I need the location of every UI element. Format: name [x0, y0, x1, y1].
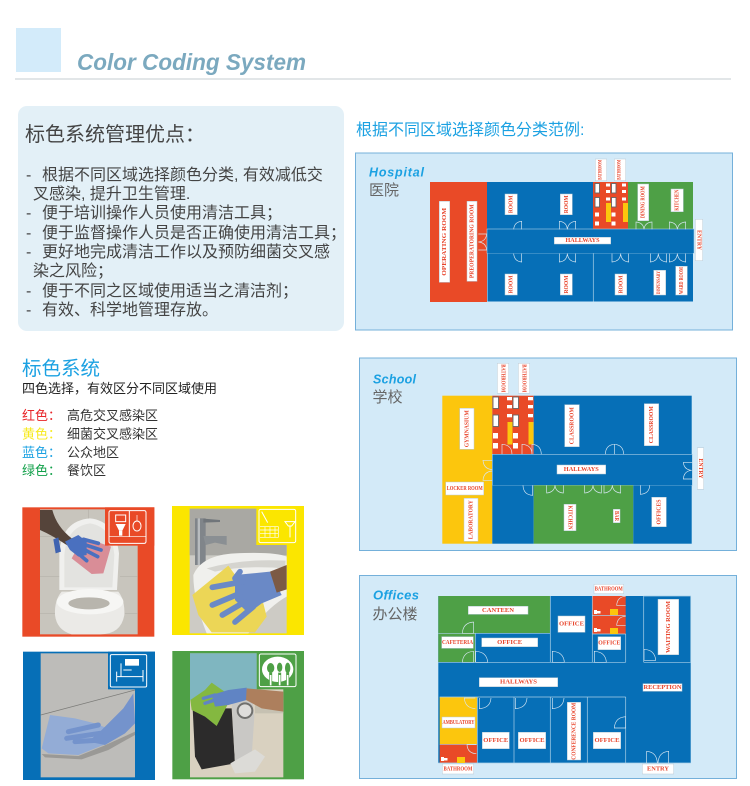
hospital room labels: ROOM: [508, 195, 515, 213]
school chinese title: 学校: [372, 389, 403, 406]
legend rows: 公众地区: [67, 445, 119, 460]
school title: School: [373, 372, 417, 386]
offices room labels: OFFICE: [483, 737, 508, 744]
offices room labels: OFFICE: [559, 621, 584, 628]
school bathroom fixtures: [493, 397, 534, 448]
hospital title: Hospital: [369, 166, 425, 180]
advantages list: 叉感染, 提升卫生管理.: [33, 185, 190, 203]
offices room labels: ENTRY: [647, 766, 669, 772]
advantages list: -: [26, 283, 31, 300]
offices walls: [438, 596, 691, 763]
hospital room labels: DINING ROOM: [640, 186, 647, 218]
advantages list: 更好地完成清洁工作以及预防细菌交叉感: [42, 243, 330, 261]
advantages list: 根据不同区域选择颜色分类, 有效减低交: [42, 166, 323, 184]
offices room labels: CONFERENCE ROOM: [570, 703, 578, 760]
hospital room labels: KITCHEN: [674, 190, 681, 211]
legend rows: 蓝色：: [22, 442, 61, 461]
legend rows: 餐饮区: [67, 463, 106, 478]
school room labels: HALLWAYS: [564, 466, 599, 473]
school room labels: BATHROOM: [500, 364, 506, 392]
offices title: Offices: [373, 588, 419, 602]
icon: fork, spoon and plate: [257, 651, 304, 689]
hospital room labels: ROOM: [563, 276, 570, 294]
offices room labels: OFFICE: [497, 639, 522, 646]
icon: hospital bed: [108, 652, 155, 689]
advantages list: 有效、科学地管理存放。: [42, 301, 218, 319]
card: blue floor: [23, 652, 155, 780]
advantages list: -: [26, 225, 31, 242]
offices room labels: AMBULATORY: [442, 719, 475, 726]
advantages list: -: [26, 167, 31, 184]
school room labels: GYMNASIUM: [463, 410, 470, 447]
school room labels: KITCHEN: [566, 506, 574, 530]
school floor plan: [442, 363, 704, 544]
offices room labels: BATHROOM: [444, 766, 472, 772]
hospital doors: [478, 221, 686, 262]
legend rows: [22, 405, 158, 479]
advantages list: -: [26, 244, 31, 261]
icon: toilet and urinal: [105, 507, 154, 546]
card: red toilet: [22, 507, 154, 637]
title: Color Coding System: [77, 49, 306, 75]
panel: advantages: [18, 106, 346, 331]
offices room labels: RECEPTION: [644, 684, 682, 691]
legend rows: 高危交叉感染区: [67, 408, 158, 423]
hospital room labels: ROOM: [508, 276, 515, 294]
colour system legend: [22, 358, 217, 479]
offices room labels: CAFETERIA: [442, 639, 473, 646]
offices doors: [462, 596, 669, 763]
heading: colour-coding examples: 根据不同区域选择颜色分类范例:: [356, 121, 584, 139]
hospital room labels: [439, 159, 703, 295]
hospital room labels: DISPENSARY: [657, 271, 662, 294]
legend rows: 细菌交叉感染区: [67, 426, 158, 442]
panel: school: [360, 358, 736, 550]
school room labels: CLASSROOM: [648, 406, 655, 443]
panel: hospital: [356, 153, 732, 330]
header colour square: [16, 28, 61, 72]
advantages list: -: [26, 205, 31, 222]
school room labels: OFFICES: [656, 499, 662, 524]
school room labels: LOCKER ROOM: [447, 485, 483, 492]
advantages list: 便于不同之区域使用适当之清洁剂；: [42, 277, 298, 301]
advantages list: 便于培训操作人员使用清洁工具；: [42, 199, 282, 223]
legend subtitle: 四色选择，有效区分不同区域使用: [22, 378, 217, 397]
offices room labels: WAITING ROOM: [665, 601, 672, 653]
card: green machine: [172, 651, 304, 779]
hospital bathroom fixtures: [595, 184, 628, 226]
advantages list: -: [26, 302, 31, 319]
panel: offices: [360, 576, 736, 778]
offices room labels: CANTEEN: [482, 607, 514, 614]
hospital room labels: BATHROOM: [598, 160, 604, 180]
legend heading: 标色系统: [22, 358, 100, 380]
offices chinese title: 办公楼: [372, 606, 418, 623]
hospital room labels: ROOM: [617, 276, 624, 294]
school room labels: CLASSROOM: [568, 407, 576, 444]
school room labels: [446, 363, 704, 541]
legend rows: 黄色：: [22, 424, 61, 442]
hospital room labels: PREOPERATORING ROOM: [468, 204, 476, 278]
offices room labels: OFFICE: [520, 737, 544, 744]
icon: sink and shower: [256, 506, 304, 545]
hospital room labels: ENTRY: [696, 230, 702, 250]
hospital room labels: HALLWAYS: [566, 237, 600, 244]
school doors: [483, 444, 692, 495]
offices room labels: OFFICE: [598, 640, 620, 647]
hospital floor plan: [430, 159, 703, 302]
legend rows: 绿色：: [22, 460, 61, 479]
advantages list: 便于监督操作人员是否正确使用清洁工具；: [42, 219, 346, 243]
school room labels: BATHROOM: [520, 364, 528, 392]
legend rows: 红色：: [22, 405, 61, 424]
hospital chinese title: 医院: [369, 181, 399, 199]
school room labels: LABORATORY: [468, 500, 474, 539]
header: [15, 28, 731, 79]
hospital room labels: ROOM: [563, 195, 570, 213]
card: yellow sink: [172, 506, 304, 635]
photo cards: [22, 506, 304, 780]
school room labels: BAR: [613, 511, 620, 521]
offices floor plan: [438, 584, 691, 774]
advantages list: 染之风险；: [33, 257, 113, 281]
offices fixtures: [441, 609, 618, 763]
offices room labels: HALLWAYS: [500, 679, 537, 686]
offices room labels: [442, 584, 682, 774]
hospital room labels: OPERATING ROOM: [441, 208, 448, 276]
offices room labels: BATHROOM: [595, 586, 623, 592]
advantages heading: 标色系统管理优点：: [25, 118, 205, 147]
offices room labels: OFFICE: [594, 737, 620, 744]
school room labels: ENTRY: [697, 458, 704, 479]
hospital room labels: WARD ROOM: [678, 267, 685, 294]
hospital room labels: BATHROOM: [618, 160, 622, 180]
advantages list: [26, 166, 346, 319]
